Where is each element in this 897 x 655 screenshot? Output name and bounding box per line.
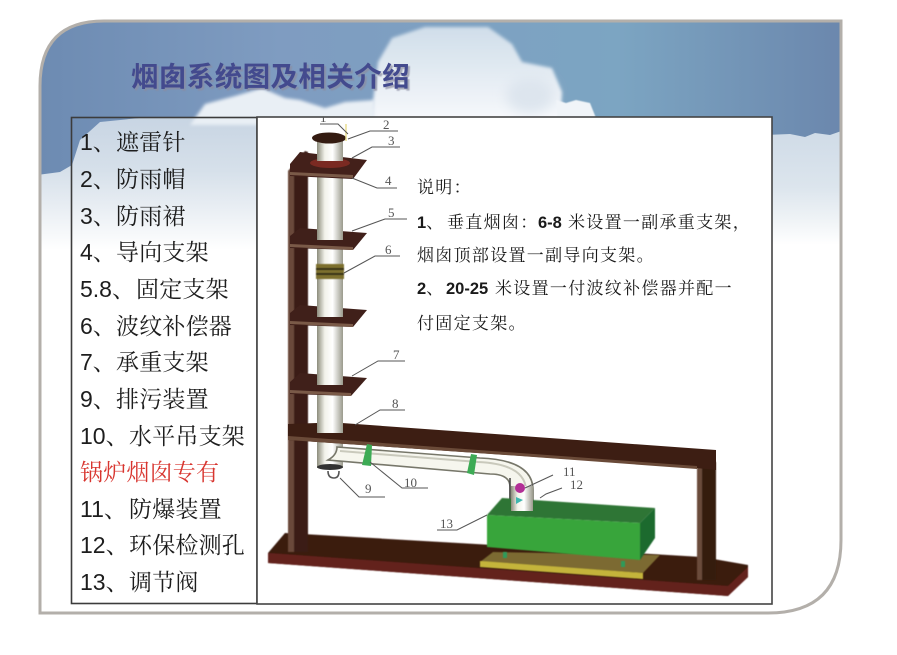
note line 3: 米设置一付波纹补偿器并配一: [495, 279, 733, 298]
vertical post: [288, 151, 308, 552]
base slab: [268, 533, 748, 596]
list item 3: 防雨裙: [116, 204, 186, 229]
horizontal beam: [288, 423, 716, 470]
load bearing shelf: [290, 374, 367, 396]
label 1: 1: [320, 110, 326, 125]
label 8: 8: [392, 396, 398, 411]
label 12: [540, 480, 582, 498]
label 6: 6: [385, 242, 392, 257]
list item 9: 排污装置: [116, 387, 209, 412]
right post: [697, 462, 716, 580]
list item 5.8: 固定支架: [136, 277, 229, 302]
green hanger clamps: [362, 444, 477, 475]
list item 5.8: 5.8、: [80, 276, 135, 302]
note line 1: 垂直烟囱：: [447, 213, 538, 232]
label 11: [524, 468, 575, 488]
list item 4: 导向支架: [116, 240, 209, 265]
label 8: [355, 396, 405, 425]
leader labels: [320, 110, 583, 531]
list item 7: 承重支架: [116, 350, 209, 375]
label 3: 3: [388, 133, 394, 148]
title: 烟囱系统图及相关介绍: [131, 61, 410, 92]
label 9: 9: [365, 481, 372, 496]
list item 2: 防雨帽: [116, 167, 186, 192]
platform: [480, 552, 660, 579]
rain cap: [312, 124, 346, 144]
label 10: [370, 462, 428, 490]
list item 10: 10、: [80, 423, 129, 449]
list item 12: 12、: [80, 532, 129, 558]
list item 9: 9、: [80, 386, 116, 412]
label 10: 10: [404, 475, 417, 490]
vertical flue pipe over boiler: [511, 486, 533, 511]
note line 1: 米设置一副承重支架，: [568, 213, 751, 232]
list item 13: 调节阀: [129, 570, 199, 595]
panel: diagram background: [257, 117, 772, 604]
list item 13: 13、: [80, 569, 129, 595]
list item 1: 遮雷针: [116, 130, 186, 155]
list item 6: 波纹补偿器: [116, 314, 232, 339]
middle shelf: [290, 306, 367, 327]
list item 12: 环保检测孔: [129, 533, 245, 558]
label 11: 11: [563, 464, 576, 479]
list item 3: 3、: [80, 203, 116, 229]
boiler box: [487, 498, 655, 567]
note line 3: 20-25: [446, 280, 488, 298]
list item 6: 6、: [80, 313, 116, 339]
vertical chimney pipe: [317, 177, 343, 470]
list item 7: 7、: [80, 349, 116, 375]
label 2: 2: [383, 117, 390, 132]
label 13: [437, 515, 487, 531]
label 12: 12: [570, 477, 583, 492]
list item 10: 水平吊支架: [129, 424, 245, 449]
list item 1: 1、: [80, 129, 116, 155]
list item 11: 防爆装置: [129, 497, 222, 522]
explosion-proof device: [515, 483, 525, 493]
fixed bracket shelf: [290, 228, 367, 250]
horizontal flue pipe: [326, 446, 534, 501]
guide bracket shelf: [290, 152, 367, 179]
description text: [417, 178, 751, 333]
label 7: 7: [393, 347, 400, 362]
note line 2: 烟囱顶部设置一副导向支架。: [417, 246, 655, 265]
title: 烟囱系统图及相关介绍: [133, 63, 412, 94]
label 4: [352, 176, 397, 188]
list item 2: 2、: [80, 166, 116, 192]
list item 4: 4、: [80, 239, 116, 265]
label 2: [348, 120, 398, 140]
note line 3: 2、: [417, 279, 444, 298]
chimney system diagram: [268, 110, 748, 596]
panel: component list: [72, 118, 257, 604]
monitoring port: [516, 497, 523, 504]
label 1: [320, 117, 348, 134]
label 3: [352, 136, 400, 158]
bellows compensator: [316, 264, 344, 279]
label 7: [352, 347, 405, 376]
red subheading: 锅炉烟囱专有: [80, 460, 219, 485]
label 5: 5: [388, 205, 394, 220]
list item 11: 11、: [80, 496, 127, 522]
label 9: [340, 478, 385, 497]
label 6: [344, 242, 400, 273]
label 5: [352, 208, 407, 232]
note line 1: 6-8: [538, 214, 562, 232]
note line 1: 1、: [417, 213, 444, 232]
drain trap: [328, 471, 339, 478]
note line 4: 付固定支架。: [417, 314, 527, 333]
note heading: 说明：: [417, 178, 472, 197]
label 4: 4: [385, 173, 392, 188]
label 13: 13: [440, 516, 453, 531]
